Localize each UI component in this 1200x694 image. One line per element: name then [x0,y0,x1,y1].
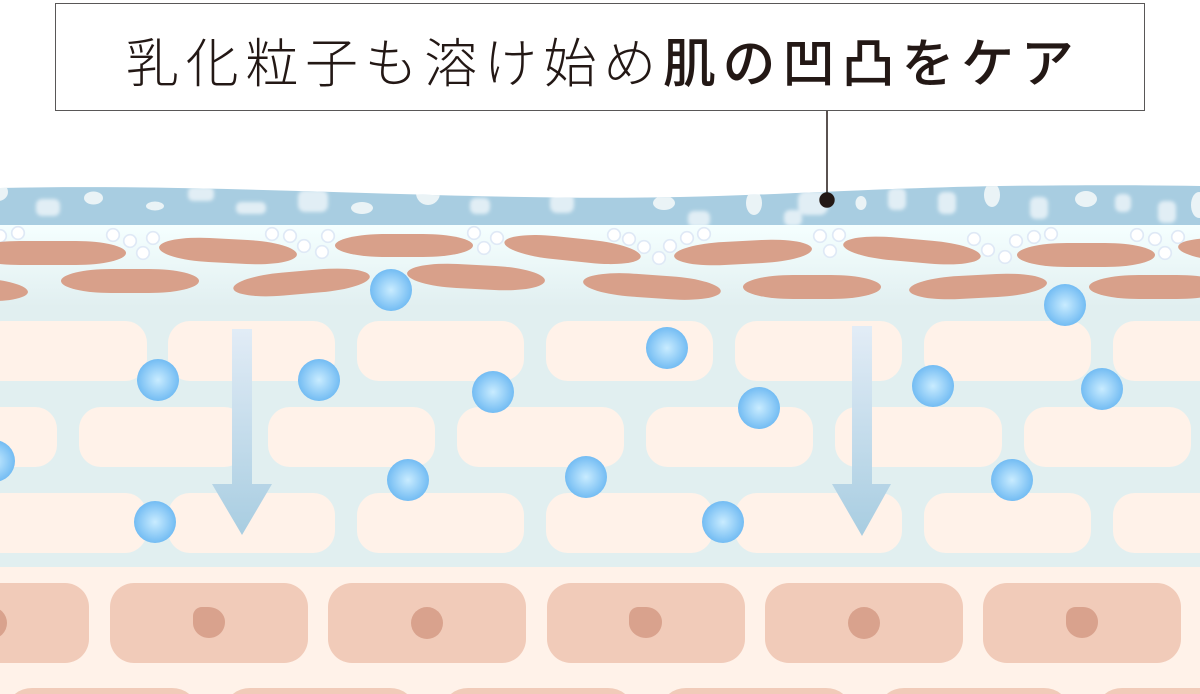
emulsion particles [0,269,1123,543]
cell nuclei [0,607,1098,639]
title text: 乳化粒子も溶け始め肌の凹凸をケア [126,35,1080,94]
basal layer cells [0,583,1200,694]
horny layer with moisture blobs [0,185,1200,225]
spinous layer cells [0,321,1200,553]
dermis background [0,225,1200,694]
intercellular lipid circles [0,227,1184,264]
title box [55,3,1145,111]
callout leader line with dot [819,110,835,208]
arrow: right downward [832,326,891,536]
arrow: left downward [212,329,272,535]
flattened corneocyte strips [0,231,1200,304]
